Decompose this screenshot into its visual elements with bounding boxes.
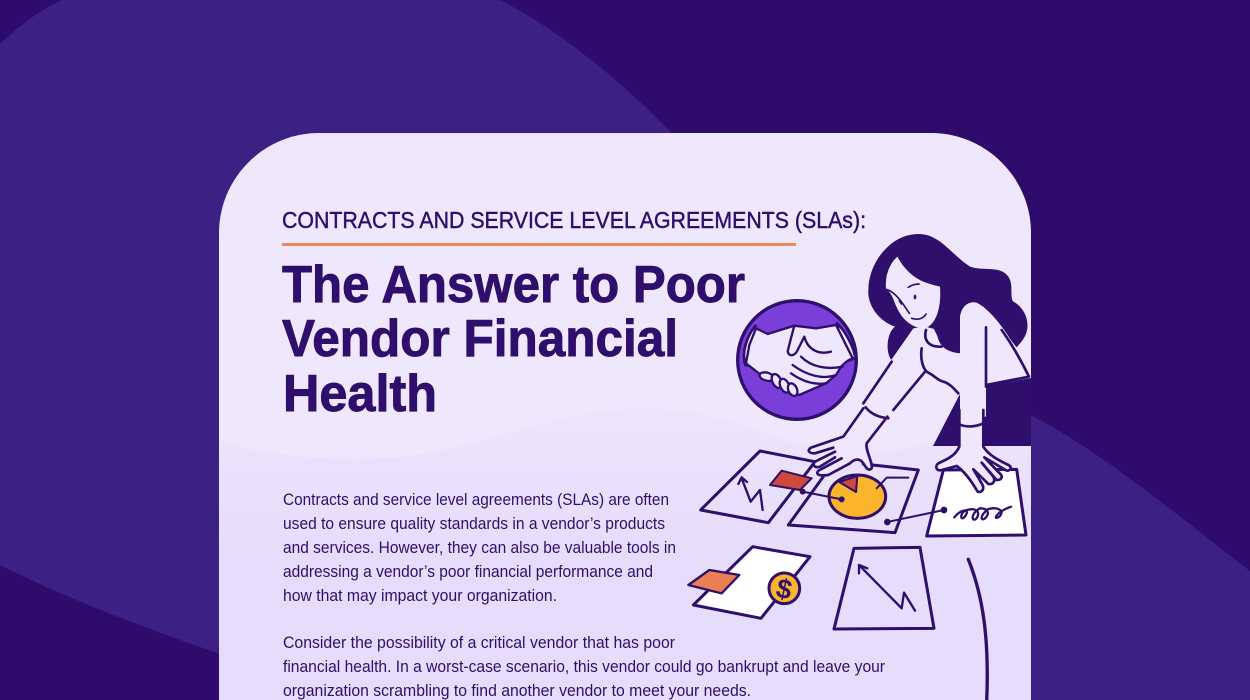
icon: handshake badge bbox=[738, 301, 856, 419]
hair bbox=[868, 234, 1028, 361]
body paragraph one: used to ensure quality standards in a vendor’s products bbox=[283, 515, 665, 533]
main title bbox=[282, 256, 745, 423]
background: right lower wave bbox=[1000, 400, 1250, 700]
body paragraph one bbox=[283, 491, 676, 605]
skirt bbox=[933, 378, 1031, 446]
card panel bbox=[219, 133, 1031, 700]
outlines bbox=[863, 327, 1029, 410]
orange tag bbox=[688, 570, 739, 593]
illustration: documents on table bbox=[688, 451, 1026, 700]
icon: dollar coin: $ bbox=[774, 572, 795, 606]
face bbox=[886, 257, 940, 328]
pie chart document bbox=[788, 464, 918, 533]
card lower wave bbox=[219, 493, 1031, 700]
right hand and signature bbox=[936, 410, 1011, 520]
left hand bbox=[809, 402, 888, 475]
document with rising arrow bbox=[701, 451, 815, 523]
body paragraph two bbox=[283, 634, 886, 700]
eyebrow heading: CONTRACTS AND SERVICE LEVEL AGREEMENTS (SLAs): bbox=[282, 207, 866, 233]
body paragraph two: Consider the possibility of a critical vendor that has poor bbox=[283, 634, 676, 652]
icon: dollar coin bbox=[769, 572, 800, 606]
red tag bbox=[770, 471, 812, 490]
illustration: woman leaning over table bbox=[860, 234, 1031, 446]
main title: Health bbox=[283, 365, 437, 423]
dollar document bbox=[693, 547, 810, 618]
body paragraph one: Contracts and service level agreements (SLAs) are often bbox=[283, 491, 669, 509]
main title: The Answer to Poor bbox=[282, 256, 745, 314]
connector: tag to pie bbox=[800, 489, 844, 502]
background: upper left light wave bbox=[0, 0, 800, 300]
table edge curve bbox=[968, 559, 987, 700]
body paragraph two: organization scrambling to find another vendor to meet your needs. bbox=[283, 682, 751, 700]
body paragraph one: and services. However, they can also be valuable tools in bbox=[283, 539, 676, 557]
body paragraph one: addressing a vendor’s poor financial performance and bbox=[283, 563, 653, 581]
facial features bbox=[886, 284, 926, 319]
right arm and shoulder bbox=[960, 302, 1012, 417]
eye bbox=[914, 295, 916, 299]
torso and upper arm bbox=[891, 327, 960, 395]
heading rule bbox=[282, 243, 796, 246]
background: left band bbox=[0, 250, 260, 668]
signed document bbox=[927, 469, 1026, 536]
body paragraph two: financial health. In a worst-case scenario, this vendor could go bankrupt and leave your bbox=[283, 658, 886, 676]
body paragraph one: how that may impact your organization. bbox=[283, 587, 557, 605]
main title: Vendor Financial bbox=[282, 310, 678, 368]
connector: pie document to signed document bbox=[885, 507, 947, 525]
document with falling arrow bbox=[834, 547, 934, 629]
